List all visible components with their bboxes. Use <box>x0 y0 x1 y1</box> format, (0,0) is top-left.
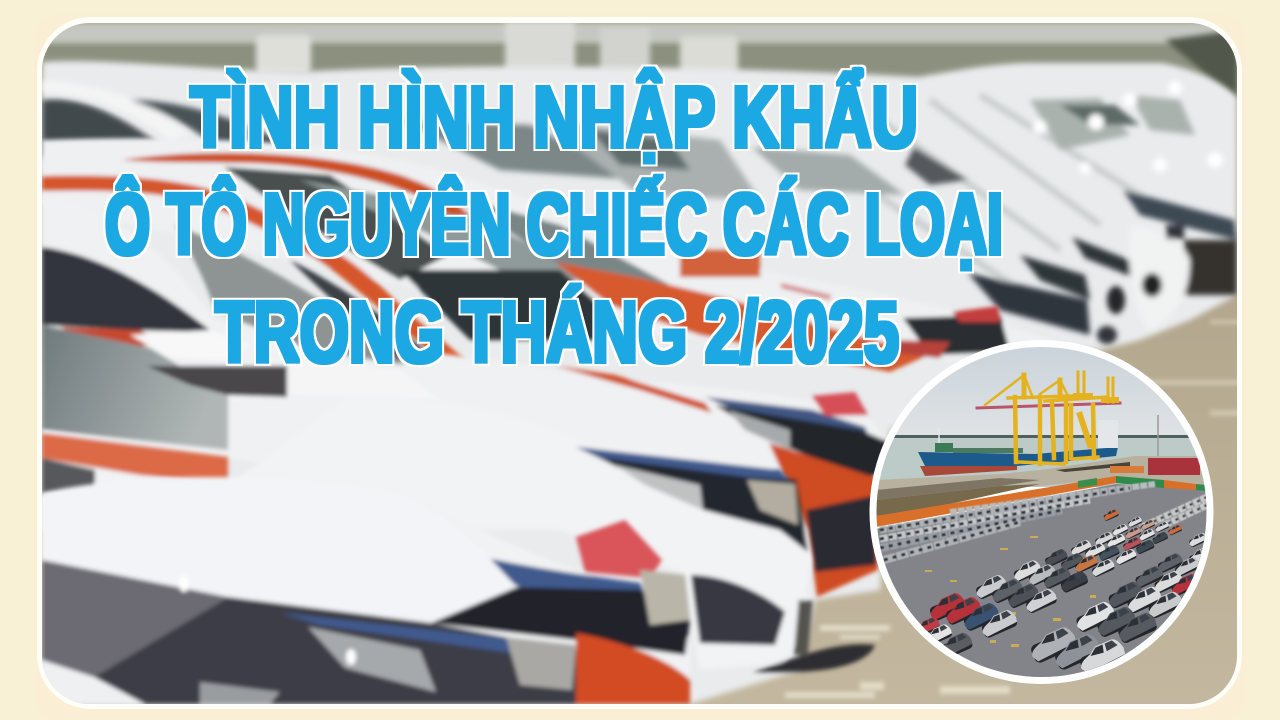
water <box>870 437 1220 487</box>
orange wall <box>876 476 1207 527</box>
title <box>105 69 1003 381</box>
nearest car <box>42 477 690 704</box>
title: TRONG THÁNG 2/2025 <box>215 284 899 381</box>
circular inset photo: car port <box>870 340 1220 690</box>
left block of cars <box>912 516 1183 661</box>
right block of cars <box>1031 532 1205 672</box>
quay <box>876 456 1207 518</box>
upper left rows <box>42 80 760 200</box>
lamp post <box>1157 415 1159 458</box>
parking lot <box>877 484 1206 677</box>
title: TÌNH HÌNH NHẬP KHẨU <box>190 69 918 166</box>
main white car <box>42 428 878 676</box>
far white cars, right side <box>752 81 1237 344</box>
red car row <box>42 138 1060 372</box>
pavement markings <box>785 625 1010 698</box>
ship <box>918 420 1118 476</box>
lot markings <box>925 536 1096 647</box>
distant car rows <box>880 484 1207 560</box>
single orange car <box>1104 509 1119 521</box>
sky <box>896 347 1188 435</box>
third row car <box>42 195 888 597</box>
yellow cranes <box>977 372 1120 464</box>
